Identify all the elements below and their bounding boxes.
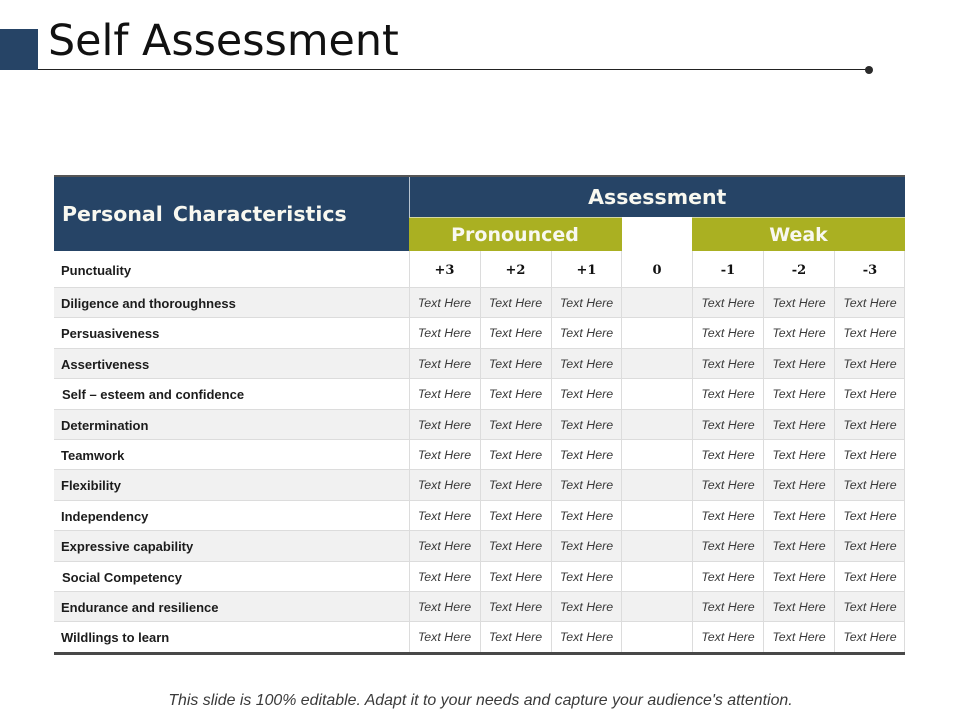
row: social competency: Text Here [843,570,897,584]
row: social competency: Text Here [560,570,613,584]
row: determination: Text Here [772,418,826,432]
row: determination: Determination [61,418,148,433]
row: assertiveness: Text Here [843,357,897,371]
row: social competency: Text Here [701,570,755,584]
row: independency: Independency [61,509,148,524]
row: wildlings [61,622,905,652]
row: persuasiveness: Text Here [772,326,826,340]
row: independency: Text Here [843,509,897,523]
score row: punctuality: -3 [863,263,877,278]
row: independency: Text Here [489,509,542,523]
row: endurance: Text Here [560,600,613,614]
row: endurance: Text Here [772,600,826,614]
row: persuasiveness: Persuasiveness [61,326,159,341]
row: self-esteem: Text Here [560,387,613,401]
row: flexibility: Text Here [772,478,826,492]
row: diligence: Text Here [489,296,542,310]
row: self-esteem: Text Here [843,387,897,401]
row: social competency: Text Here [772,570,826,584]
row: determination: Text Here [701,418,755,432]
score row: punctuality: +2 [506,263,525,278]
row: diligence: Text Here [701,296,755,310]
row: flexibility [54,470,905,501]
header accent square [0,29,38,70]
score row: punctuality: -2 [792,263,806,278]
row: flexibility: Text Here [701,478,755,492]
score row: punctuality: 0 [652,263,662,278]
row: social competency [54,562,905,592]
row: endurance: Text Here [701,600,755,614]
row: persuasiveness: Text Here [560,326,613,340]
row: determination: Text Here [843,418,897,432]
row: teamwork [54,440,905,470]
header: weak [692,217,905,251]
row: self-esteem [54,379,905,410]
score row: punctuality: +1 [577,263,596,278]
row: self-esteem: Text Here [701,387,755,401]
title rule with end dot [38,66,873,74]
row: teamwork: Text Here [560,448,613,462]
score row: punctuality: +3 [435,263,454,278]
row: expressive capability: Text Here [843,539,897,553]
row: wildlings: Text Here [489,630,542,644]
row: assertiveness: Text Here [489,357,542,371]
row: independency: Text Here [772,509,826,523]
row: self-esteem: Text Here [489,387,542,401]
row: wildlings: Text Here [418,630,471,644]
row: independency [54,501,905,531]
row: flexibility: Flexibility [61,478,121,493]
row: endurance: Text Here [843,600,897,614]
score row: punctuality [54,251,905,288]
row: independency: Text Here [701,509,755,523]
row: wildlings: Text Here [772,630,826,644]
row: assertiveness: Text Here [418,357,471,371]
row: wildlings: Wildlings to learn [61,630,169,645]
row: determination [54,410,905,440]
table top border [54,175,905,177]
row: wildlings: Text Here [701,630,755,644]
row: endurance: Text Here [489,600,542,614]
row: flexibility: Text Here [560,478,613,492]
row: teamwork: Text Here [418,448,471,462]
row: determination: Text Here [418,418,471,432]
row: persuasiveness: Text Here [489,326,542,340]
row: assertiveness: Text Here [701,357,755,371]
row: diligence: Text Here [560,296,613,310]
header: pronounced [408,217,622,251]
row: assertiveness: Assertiveness [61,357,149,372]
row: independency: Text Here [418,509,471,523]
row: assertiveness: Text Here [772,357,826,371]
header: assessment: Assessment [588,185,726,209]
header: weak: Weak [769,224,828,246]
row: teamwork: Text Here [701,448,755,462]
header: assessment [408,177,905,217]
score row: punctuality: Punctuality [61,263,131,278]
row: self-esteem: Text Here [772,387,826,401]
row: teamwork: Text Here [489,448,542,462]
title: Self Assessment [48,16,399,66]
row: expressive capability: Text Here [560,539,613,553]
row: diligence: Text Here [843,296,897,310]
row: expressive capability [54,531,905,562]
row: flexibility: Text Here [418,478,471,492]
row: self-esteem: Text Here [418,387,471,401]
row: flexibility: Text Here [843,478,897,492]
row: endurance [54,592,905,622]
row: determination: Text Here [489,418,542,432]
row: teamwork: Text Here [843,448,897,462]
row: expressive capability: Text Here [772,539,826,553]
header: pronounced: Pronounced [451,224,579,246]
header: personal characteristics [54,177,409,251]
row: persuasiveness: Text Here [843,326,897,340]
header: personal characteristics: Personal Characteristics [62,202,347,226]
row: expressive capability: Text Here [489,539,542,553]
row: social competency: Social Competency [62,570,182,585]
row: teamwork: Teamwork [61,448,124,463]
row: self-esteem: Self – esteem and confidence [62,387,244,402]
row: social competency: Text Here [418,570,471,584]
row: expressive capability: Text Here [418,539,471,553]
row: wildlings: Text Here [843,630,897,644]
row: persuasiveness: Text Here [701,326,755,340]
row: expressive capability: Text Here [701,539,755,553]
row: expressive capability: Expressive capability [61,539,193,554]
score row: punctuality: -1 [721,263,735,278]
row: independency: Text Here [560,509,613,523]
row: endurance: Text Here [418,600,471,614]
row: diligence: Text Here [418,296,471,310]
row: persuasiveness [54,318,905,349]
row: wildlings: Text Here [560,630,613,644]
footer note: This slide is 100% editable. Adapt it to your needs and capture your audience's attention. [168,692,793,709]
assessment table [54,175,905,251]
row: persuasiveness: Text Here [418,326,471,340]
row: endurance: Endurance and resilience [61,600,219,615]
table bottom border [54,652,905,655]
row: diligence: Text Here [772,296,826,310]
row: flexibility: Text Here [489,478,542,492]
row: assertiveness [54,349,905,379]
row: teamwork: Text Here [772,448,826,462]
row: assertiveness: Text Here [560,357,613,371]
row: diligence: Diligence and thoroughness [61,296,236,311]
row: diligence [54,288,905,318]
row: social competency: Text Here [489,570,542,584]
row: determination: Text Here [560,418,613,432]
